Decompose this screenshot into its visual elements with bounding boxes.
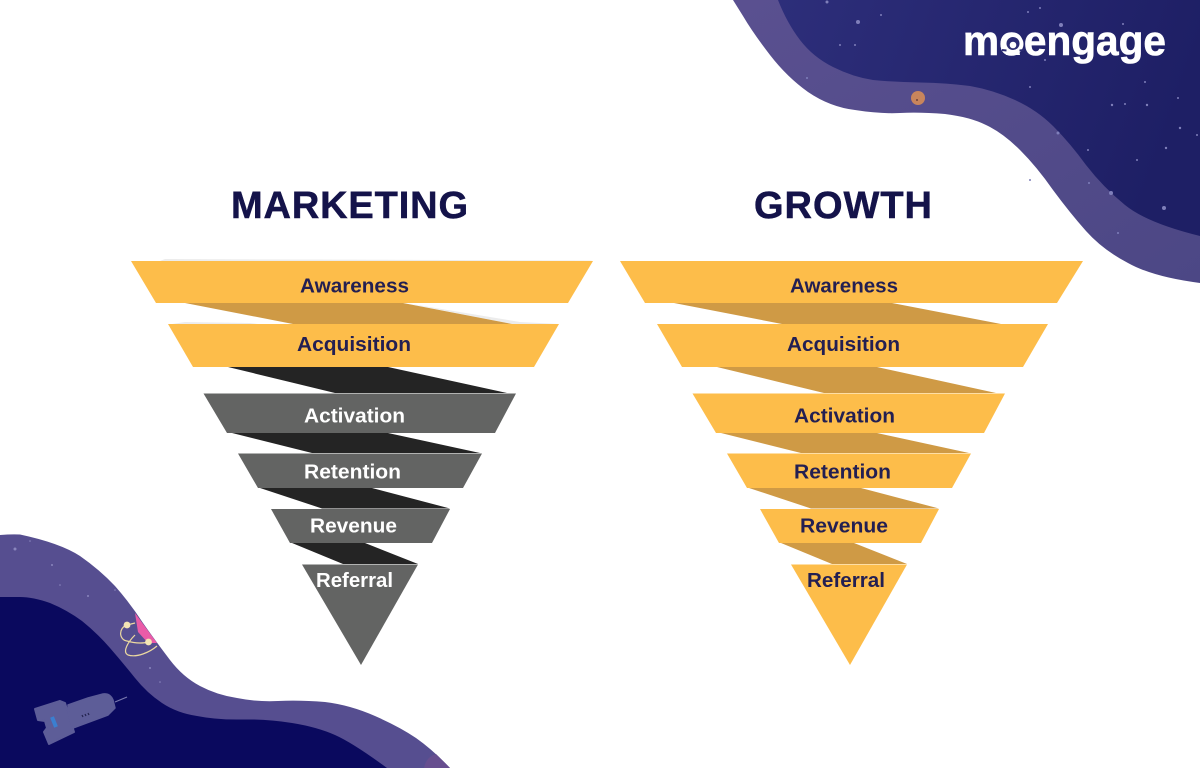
band: awareness: Awareness: [790, 276, 898, 298]
band: referral: [791, 564, 907, 665]
icon: orange planet: [911, 91, 925, 105]
print smudges along band edges: [160, 259, 593, 324]
growth funnel: [620, 261, 1083, 665]
bottom-left space blob: [0, 534, 450, 768]
icon: rocket: [35, 694, 127, 744]
top-right space blob: [733, 0, 1200, 283]
band: acquisition: Acquisition: [787, 334, 900, 356]
band: revenue: Revenue: [310, 516, 397, 538]
band: acquisition: [168, 324, 559, 367]
connector folds: [674, 303, 1001, 564]
band: awareness: [620, 261, 1083, 303]
moengage logo: moengage: [963, 17, 1166, 64]
heading: growth: GROWTH: [754, 185, 932, 227]
band: awareness: [131, 261, 593, 303]
band: revenue: [760, 509, 939, 543]
band: activation: Activation: [304, 406, 405, 428]
band: referral: [302, 564, 418, 665]
band: acquisition: [657, 324, 1048, 367]
band: activation: Activation: [794, 406, 895, 428]
band: referral: Referral: [316, 570, 393, 592]
logo person mark in the letter o: [1002, 34, 1024, 55]
band: revenue: Revenue: [800, 516, 888, 538]
icon: pink planet with orbits: [121, 613, 157, 656]
band: revenue: [271, 509, 450, 543]
connector folds: [185, 303, 512, 564]
band: retention: [238, 454, 482, 488]
marketing funnel: [131, 259, 593, 665]
band: referral: Referral: [807, 570, 885, 592]
band: retention: [727, 454, 971, 488]
heading: marketing: MARKETING: [231, 185, 468, 227]
band: retention: Retention: [304, 462, 401, 484]
band: activation: [204, 394, 516, 433]
band: acquisition: Acquisition: [297, 334, 411, 356]
band: activation: [692, 394, 1005, 433]
band: retention: Retention: [794, 462, 891, 484]
band: awareness: Awareness: [300, 276, 409, 298]
